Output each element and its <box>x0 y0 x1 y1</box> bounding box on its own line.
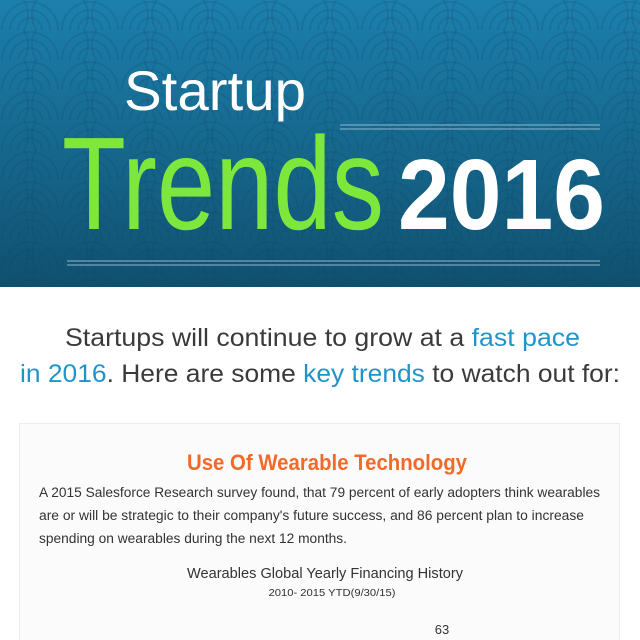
title: Startup: Startup <box>124 59 306 122</box>
intro text: Startups will continue to grow at a fast pace <box>65 324 580 352</box>
intro text <box>20 324 620 388</box>
title: Trends: Trends <box>62 110 384 257</box>
panel body text: are or will be strategic to their company's future success, and 86 percent plan to increase <box>39 508 584 523</box>
chart value label: 63 <box>435 622 449 637</box>
intro text: in 2016. Here are some key trends to watch out for: <box>20 360 620 388</box>
panel body text: spending on wearables during the next 12 months. <box>39 531 347 546</box>
panel: wearable technology <box>20 424 620 640</box>
banner <box>0 0 640 287</box>
panel body text: A 2015 Salesforce Research survey found, that 79 percent of early adopters think wearables <box>39 485 600 500</box>
title: 2016: 2016 <box>398 139 605 251</box>
chart title: Wearables Global Yearly Financing History <box>187 565 463 582</box>
panel heading: Use Of Wearable Technology <box>187 450 468 475</box>
chart subtitle: 2010- 2015 YTD(9/30/15) <box>268 588 396 599</box>
panel body text <box>39 485 600 546</box>
